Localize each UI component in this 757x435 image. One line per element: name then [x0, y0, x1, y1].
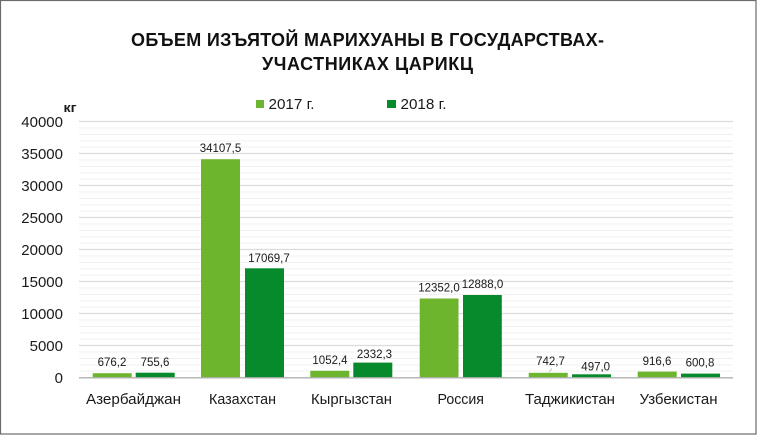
y axis labels: 0	[55, 370, 63, 387]
data labels: 742,7	[536, 356, 565, 368]
data labels: 676,2	[98, 357, 126, 369]
data labels: 916,6	[643, 356, 671, 368]
data labels	[98, 143, 714, 374]
x axis category labels: Таджикистан	[525, 392, 615, 408]
leader line	[549, 368, 552, 372]
x axis category labels: Азербайджан	[86, 392, 181, 408]
data labels: 2332,3	[357, 349, 392, 361]
y axis labels: 10000	[21, 306, 63, 323]
y axis labels: 25000	[21, 210, 63, 227]
y axis labels: 5000	[30, 338, 63, 355]
data labels: 600,8	[686, 358, 714, 370]
y axis labels: 35000	[21, 146, 63, 163]
data labels: 497,0	[581, 362, 610, 374]
data labels: 12888,0	[462, 279, 503, 291]
x axis category labels: Казахстан	[209, 392, 276, 408]
x axis line	[79, 377, 733, 379]
legend: 2018 г.	[400, 96, 446, 113]
bars: Казахстан	[201, 159, 284, 378]
bars: Россия	[420, 295, 502, 378]
data labels: 755,6	[141, 357, 169, 369]
y axis labels	[21, 114, 63, 387]
x axis category labels: Кыргызстан	[311, 392, 392, 408]
title: ОБЪЕМ ИЗЪЯТОЙ МАРИХУАНЫ В ГОСУДАРСТВАХ-	[131, 29, 604, 50]
y axis labels: 15000	[21, 274, 63, 291]
data labels: 34107,5	[200, 143, 241, 155]
data labels: 17069,7	[248, 253, 290, 265]
x axis category labels: Узбекистан	[640, 392, 718, 408]
x axis category labels	[86, 392, 718, 408]
bars: Узбекистан	[638, 372, 720, 378]
title: УЧАСТНИКАХ ЦАРИКЦ	[262, 54, 474, 74]
bars: Кыргызстан	[310, 363, 392, 378]
title	[131, 29, 604, 74]
y axis labels: 30000	[21, 178, 63, 195]
data labels: 12352,0	[418, 282, 460, 294]
y axis labels: 40000	[21, 114, 63, 131]
bar chart	[93, 159, 720, 378]
y axis labels: 20000	[21, 242, 63, 259]
bars: Таджикистан	[529, 373, 611, 378]
data labels: 1052,4	[312, 355, 348, 367]
legend	[256, 96, 446, 113]
legend: 2017 г.	[268, 96, 314, 113]
x axis category labels: Россия	[438, 392, 484, 408]
bars: Азербайджан	[93, 373, 175, 378]
unit label: кг	[64, 100, 77, 115]
